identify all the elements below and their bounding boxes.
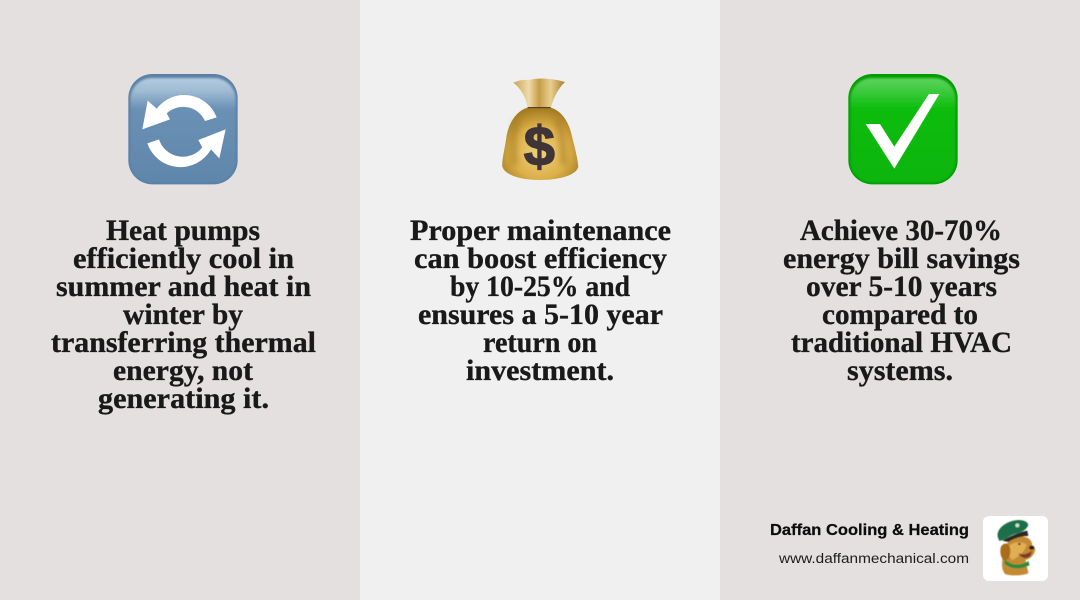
text: maintenance description: investment. [466,354,614,387]
footer: company branding [770,516,1048,581]
icon: money bag [502,79,578,180]
text: heat pumps description: Heat pumps [106,214,260,247]
panel: heat pump operation [51,74,316,415]
logo: dog with green beret [983,516,1048,581]
icon: green check mark [848,74,958,184]
text: savings description [783,214,1020,387]
text: maintenance description: Proper maintenance [410,214,671,247]
text: heat pumps description [51,214,316,415]
text: maintenance description: return on [483,326,597,359]
panel: maintenance [360,0,720,600]
text: savings description: energy bill savings [783,242,1020,275]
icon: blue refresh arrows [128,74,238,184]
website: www.daffanmechanical.com [778,551,969,566]
text: heat pumps description: summer and heat in [56,270,311,303]
text: savings description: systems. [847,354,953,387]
panel: savings [784,74,1020,387]
text: maintenance description: by 10-25% and [450,270,630,303]
text: savings description: compared to [822,298,978,331]
text: maintenance description: can boost efficiency [414,242,667,275]
text: savings description: traditional HVAC [791,326,1012,359]
text: heat pumps description: efficiently cool in [73,242,294,275]
icon: money bag: $ [524,114,555,177]
text: savings description: Achieve 30-70% [800,214,1002,247]
text: heat pumps description: energy, not [113,354,253,387]
text: maintenance description [410,214,671,387]
text: maintenance description: ensures a 5-10 year [418,298,663,331]
text: heat pumps description: winter by [123,298,243,331]
text: heat pumps description: generating it. [98,382,269,415]
text: heat pumps description: transferring thermal [51,326,316,359]
text: savings description: over 5-10 years [806,270,997,303]
company name: Daffan Cooling & Heating [770,522,969,539]
